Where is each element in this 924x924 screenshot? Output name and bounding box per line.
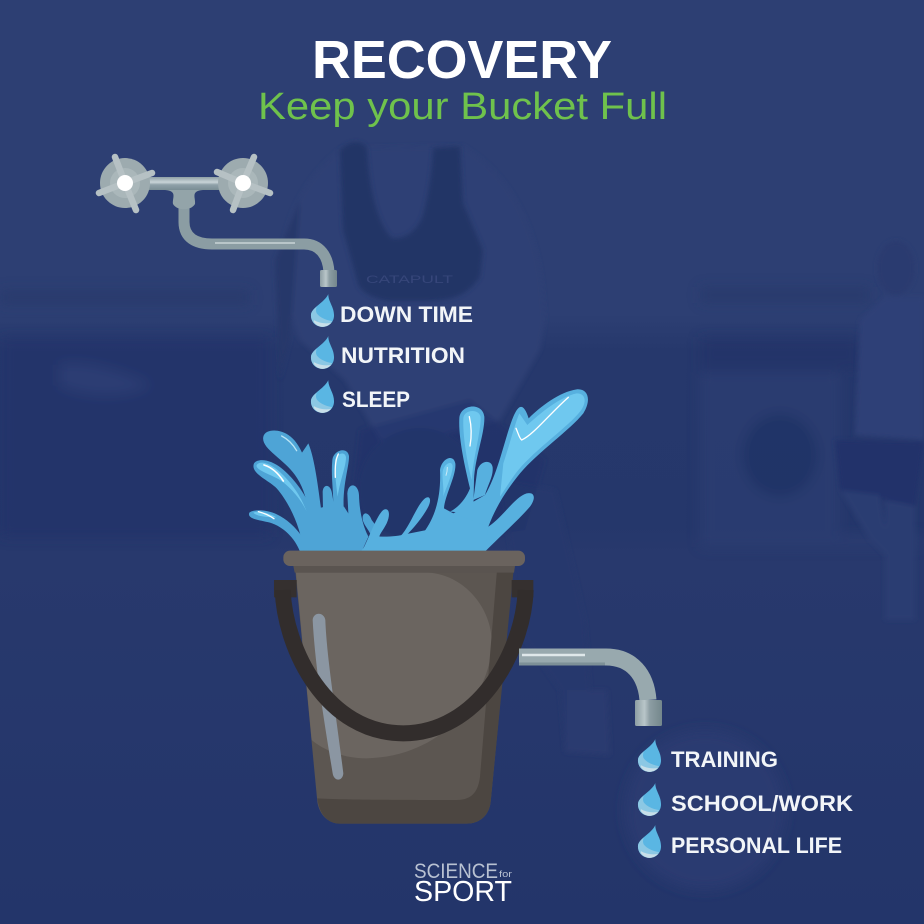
splash left group	[249, 431, 377, 552]
logo: Science for Sport: SCIENCE	[414, 860, 498, 883]
bucket shaded side and base	[317, 566, 514, 824]
drop and label: personal life	[638, 825, 842, 858]
list: water in	[311, 294, 473, 413]
drop and label: school/work	[638, 783, 853, 816]
splash highlights	[258, 397, 568, 519]
football silhouette	[625, 730, 785, 890]
drop and label: down time: DOWN TIME	[340, 302, 473, 327]
list: water out	[638, 739, 853, 858]
drop and label: sleep: SLEEP	[342, 387, 410, 412]
icon: outlet tap	[519, 655, 662, 726]
drop and label: nutrition: NUTRITION	[341, 343, 465, 368]
drop and label: training: TRAINING	[671, 747, 778, 772]
distant player silhouette	[835, 241, 924, 620]
drop and label: training	[638, 739, 778, 772]
central player silhouette	[275, 146, 610, 755]
tap spout pipe	[184, 205, 329, 272]
drop and label: sleep	[311, 380, 410, 413]
icon: bucket	[274, 551, 533, 824]
subtitle: Keep your Bucket Full	[258, 86, 667, 128]
tap nozzle	[320, 270, 337, 287]
drop and label: personal life: PERSONAL LIFE	[671, 833, 842, 858]
bucket highlight	[313, 614, 343, 780]
left tap knob	[99, 157, 152, 210]
tap cross bar	[130, 177, 238, 190]
vest sponsor text: CATAPULT	[366, 274, 453, 286]
bucket body	[294, 560, 514, 824]
title: RECOVERY	[312, 30, 612, 90]
player vest	[340, 142, 483, 301]
icon: water splash	[249, 389, 588, 552]
splash lighter tips	[253, 393, 585, 517]
tap junction	[165, 190, 203, 209]
right tap knob	[217, 157, 270, 210]
icon: top wall tap	[99, 157, 337, 287]
bucket rim	[283, 551, 525, 566]
drop and label: down time	[311, 294, 473, 327]
drop and label: school/work: SCHOOL/WORK	[671, 791, 853, 816]
bucket lit area	[296, 573, 492, 758]
bucket handle	[274, 580, 533, 733]
logo: Science for Sport: SPORT	[414, 876, 512, 908]
outlet pipe	[519, 657, 648, 700]
stadium stands	[0, 287, 924, 547]
drop and label: nutrition	[311, 336, 465, 369]
logo: Science for Sport	[414, 860, 512, 908]
splash right group	[361, 389, 588, 552]
outlet nozzle	[635, 700, 662, 726]
logo: Science for Sport: for	[499, 869, 512, 879]
